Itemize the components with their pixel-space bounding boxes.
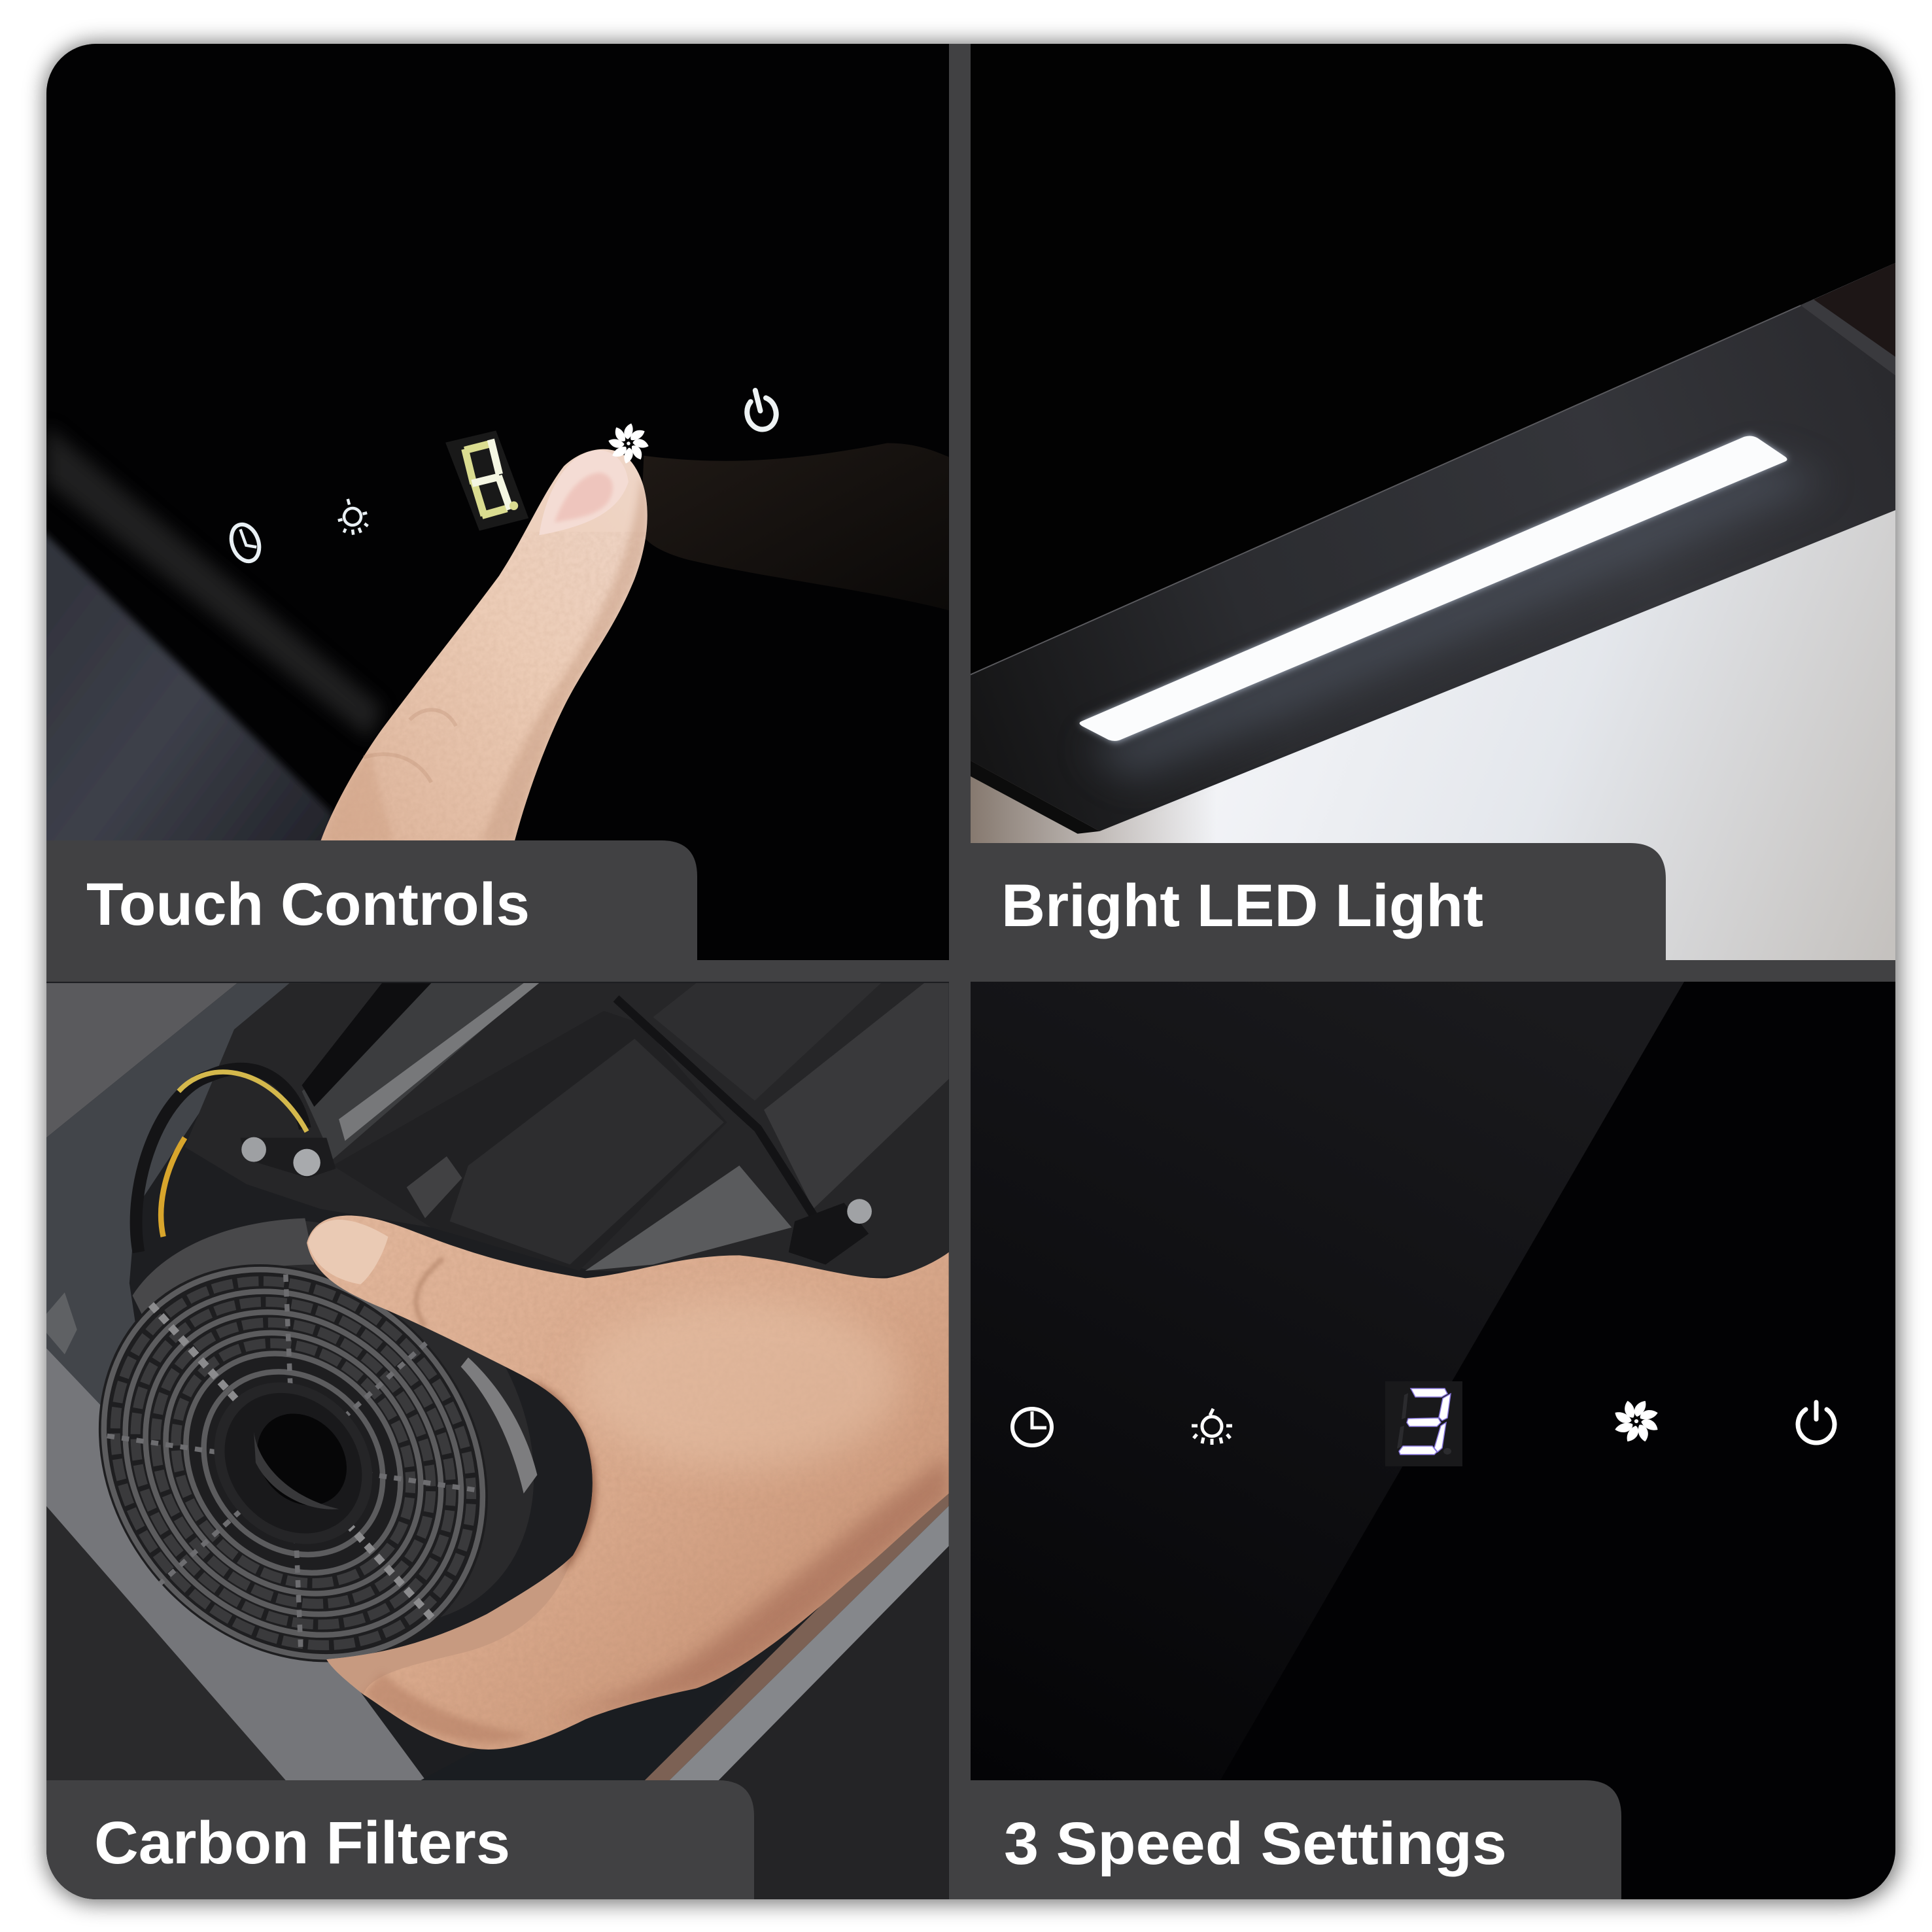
LED strip [1080,436,1787,741]
heading: 3 Speed Settings [1004,1810,1507,1877]
panel: bright LED light [970,44,1895,960]
display: digit 3 [1385,1381,1462,1466]
thumbnail [308,1220,388,1285]
icon: power [742,387,780,432]
metal plate [46,983,237,1138]
label tab: Bright LED Light [971,843,1666,960]
hand [307,1216,949,1750]
glass reflection [971,982,1684,1899]
icon: clock [226,521,264,565]
heading: Carbon Filters [94,1810,510,1876]
panel: touch controls [31,44,949,960]
label tab: Carbon Filters [46,1780,754,1899]
panel: carbon filters [18,982,955,1902]
icon: clock [1012,1409,1052,1445]
screws [240,1138,336,1178]
frame left [46,1348,426,1781]
front finger [320,449,647,842]
icon: fan [605,420,652,467]
icon: light bulb [334,495,371,538]
photo: hand holding carbon filter [18,983,955,1902]
LED glow [1080,435,1788,742]
heading: Bright LED Light [1001,872,1483,939]
label tab: Touch Controls [46,840,697,960]
label tab: 3 Speed Settings [971,1780,1621,1899]
blower housing [185,983,949,1277]
icon: fan [1615,1400,1658,1442]
rear finger [641,443,949,610]
photo: finger touching control panel [31,426,949,857]
fingernail [539,450,629,535]
icon: power [1798,1402,1835,1443]
heading: Touch Controls [86,871,530,938]
LED ambient glow [1087,457,1826,779]
icon: light bulb [1192,1409,1232,1445]
wiring [136,1069,305,1252]
panel: 3 speed settings [971,982,1895,1899]
carbon filter [18,1143,613,1742]
display: digit [445,430,528,531]
photo: hood underside with LED strip [970,44,1895,834]
frame right [419,1642,770,1781]
